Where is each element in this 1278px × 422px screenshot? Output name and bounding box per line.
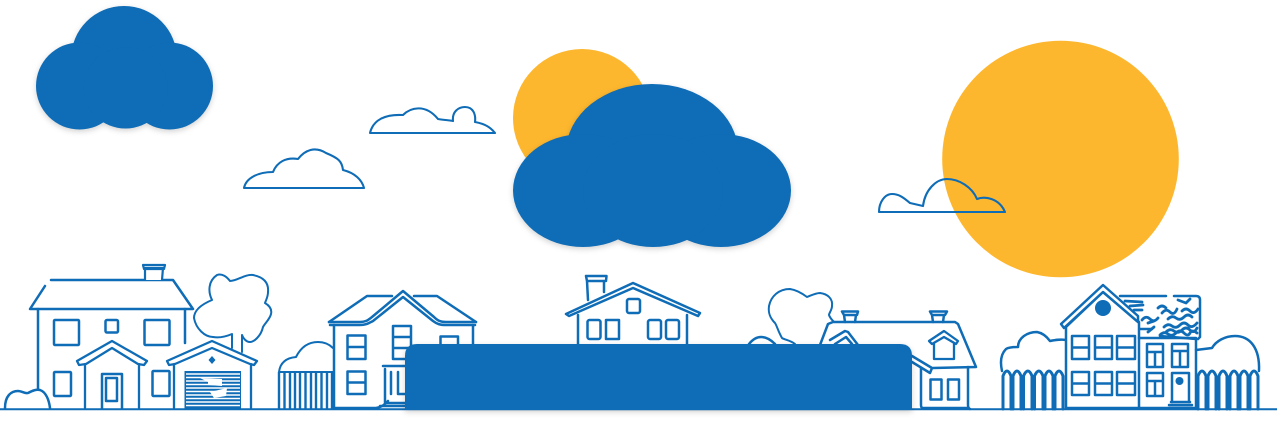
right dormer <box>929 331 958 359</box>
right fence <box>1198 371 1258 409</box>
porch <box>380 366 406 406</box>
tree <box>194 274 271 352</box>
house 2: two-storey with fence <box>279 291 476 409</box>
ground line <box>0 408 1277 410</box>
main windows <box>1072 336 1135 395</box>
left bush <box>1001 332 1066 371</box>
shingle roof <box>1120 296 1200 339</box>
chimney <box>586 276 606 300</box>
house 3: cottage with chimney <box>566 276 700 345</box>
icon: solid cloud centre <box>513 84 791 247</box>
roof <box>329 291 476 325</box>
banner panel <box>405 344 912 410</box>
bush behind fence <box>279 342 333 372</box>
porch eave <box>912 356 932 373</box>
chimneys <box>842 312 947 322</box>
tree <box>769 289 834 344</box>
house 4: gambrel house with tree <box>749 289 976 409</box>
left fence <box>1003 371 1063 409</box>
attic window <box>627 299 640 313</box>
walls <box>38 309 185 389</box>
garage <box>167 341 257 408</box>
icon: garage vent <box>208 356 216 364</box>
lower windows <box>54 371 170 396</box>
left dormer <box>830 331 858 345</box>
icon: outline cloud middle <box>370 107 495 133</box>
side wing wall <box>1139 338 1196 408</box>
roof <box>820 322 976 368</box>
door <box>102 374 122 408</box>
side windows <box>1147 344 1188 396</box>
walls <box>334 325 473 408</box>
icon: large sun right <box>942 41 1179 277</box>
wall base <box>334 401 388 408</box>
windows <box>930 380 959 400</box>
windows <box>588 320 679 339</box>
main gable <box>1066 292 1139 408</box>
right bush <box>1196 336 1259 371</box>
icon: small sun behind cloud <box>513 49 651 187</box>
roof <box>566 283 700 316</box>
walls <box>578 315 687 345</box>
roof <box>30 280 193 309</box>
house 5: townhouse with fences <box>1001 285 1259 409</box>
bush <box>749 337 775 344</box>
house 1: two-storey with garage and tree <box>5 265 271 409</box>
icon: outline cloud over sun <box>879 179 1005 212</box>
walls <box>921 367 970 409</box>
porch <box>77 341 147 408</box>
icon: round attic window <box>1095 300 1111 316</box>
door <box>1168 373 1193 408</box>
fence <box>279 372 333 409</box>
windows <box>348 326 458 394</box>
icon: outline cloud left <box>244 149 364 188</box>
bush <box>5 390 50 408</box>
garage door <box>184 371 241 409</box>
icon: solid cloud top left <box>36 6 213 130</box>
upper windows <box>54 320 170 345</box>
chimney <box>143 265 165 280</box>
